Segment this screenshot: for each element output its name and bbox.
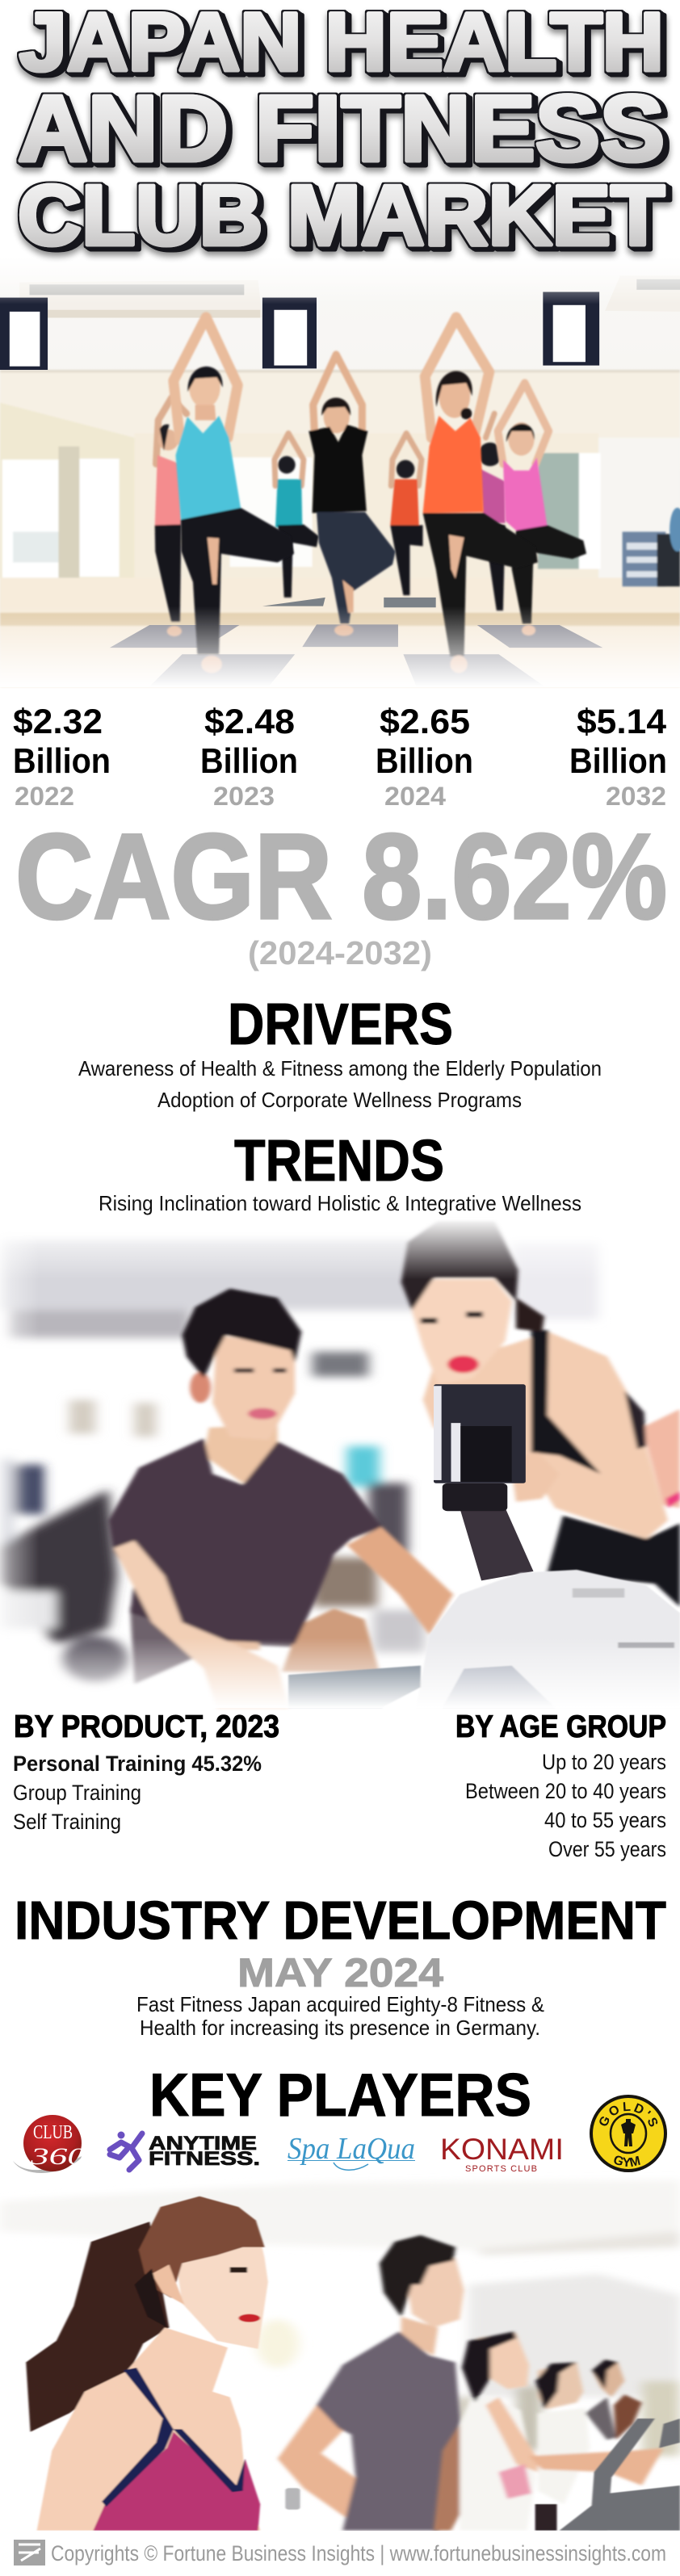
by product list: Group Training [13, 1781, 141, 1805]
pink top woman [497, 383, 586, 636]
by product segment [13, 1710, 279, 1834]
trends heading: TRENDS [234, 1129, 444, 1194]
logo: Anytime Fitness [110, 2132, 260, 2170]
by age group list: Up to 20 years [542, 1750, 666, 1774]
rowing machine photo [0, 1211, 680, 1708]
runners in background [434, 2331, 664, 2531]
logo: Konami Sports Club: SPORTS CLUB [465, 2164, 537, 2174]
woman in pink sports top [26, 2196, 268, 2531]
value 2022 [13, 703, 111, 811]
drivers list: Adoption of Corporate Wellness Programs [157, 1088, 522, 1112]
logo: Anytime Fitness: FITNESS. [149, 2148, 260, 2170]
cyan top woman [174, 317, 294, 673]
rower flywheel [288, 1570, 680, 1708]
man in grey shirt [278, 2235, 464, 2531]
rower monitor [434, 1384, 534, 1580]
value 2023: $2.48 [204, 703, 295, 741]
man rowing [108, 1289, 453, 1708]
footer [14, 2540, 666, 2566]
value 2022: $2.32 [13, 703, 103, 741]
value 2032: 2032 [606, 782, 666, 811]
value 2023: Billion [200, 741, 298, 781]
logo: Gold's Gym [590, 2095, 667, 2172]
logo: Club 360 [13, 2115, 86, 2173]
development text: Health for increasing its presence in Germany. [140, 2016, 540, 2040]
title [18, 0, 665, 263]
woman trainer [401, 1220, 680, 1607]
back dancers [155, 398, 506, 636]
drivers list [78, 1056, 602, 1112]
CAGR period: (2024-2032) [248, 934, 432, 971]
high windows [0, 292, 599, 370]
logo: Gold's Gym: GOLD'S [599, 2102, 657, 2127]
running figure [110, 2132, 142, 2170]
value 2022: 2022 [15, 782, 74, 811]
key players heading: KEY PLAYERS [149, 2061, 531, 2129]
treadmill runners photo [0, 2180, 680, 2531]
by product list: Personal Training 45.32% [13, 1752, 262, 1776]
logo: Gold's Gym: GYM [614, 2156, 640, 2167]
value 2022: Billion [13, 741, 111, 781]
logo: Club 360: 360 [29, 2143, 86, 2170]
development text: Fast Fitness Japan acquired Eighty-8 Fitness & [136, 1992, 544, 2016]
logo: Konami Sports Club: KONAMI [440, 2133, 564, 2166]
by product list [13, 1752, 262, 1834]
footer logo [14, 2540, 45, 2566]
value 2032: Billion [569, 741, 667, 781]
yoga class photo [0, 256, 680, 687]
step stack [623, 508, 680, 586]
man in black [309, 355, 396, 636]
logo: Spa LaQua: Spa LaQua [288, 2132, 415, 2166]
by age group list [465, 1750, 666, 1861]
air conditioners [19, 275, 680, 317]
value 2024: Billion [376, 741, 473, 781]
value 2032: $5.14 [577, 703, 666, 741]
blurred gym background [0, 1239, 598, 1683]
by product list: Self Training [13, 1810, 121, 1834]
value 2024: $2.65 [380, 703, 470, 741]
development text [136, 1992, 544, 2040]
orange top woman [423, 317, 538, 673]
trends text: Rising Inclination toward Holistic & Integrative Wellness [99, 1191, 581, 1215]
mats [110, 598, 602, 686]
logo: Club 360: CLUB [33, 2122, 73, 2143]
by age group segment [455, 1710, 666, 1861]
value 2024: 2024 [384, 782, 446, 811]
title line 3: CLUB MARKET [18, 168, 665, 263]
drivers heading: DRIVERS [228, 992, 453, 1057]
title line 2: AND FITNESS [18, 76, 665, 181]
drivers list: Awareness of Health & Fitness among the Elderly Population [78, 1056, 602, 1080]
by product heading: BY PRODUCT, 2023 [14, 1710, 279, 1744]
value 2024 [376, 703, 473, 811]
value 2032 [569, 703, 667, 811]
treadmills [285, 2419, 680, 2531]
value 2023 [200, 703, 298, 811]
by age group list: 40 to 55 years [544, 1808, 666, 1832]
market values by year [13, 703, 667, 811]
development date: MAY 2024 [237, 1950, 443, 1995]
gym background [0, 2180, 680, 2461]
value 2023: 2023 [213, 782, 275, 811]
logo: Anytime Fitness: ANYTIME [149, 2133, 257, 2154]
